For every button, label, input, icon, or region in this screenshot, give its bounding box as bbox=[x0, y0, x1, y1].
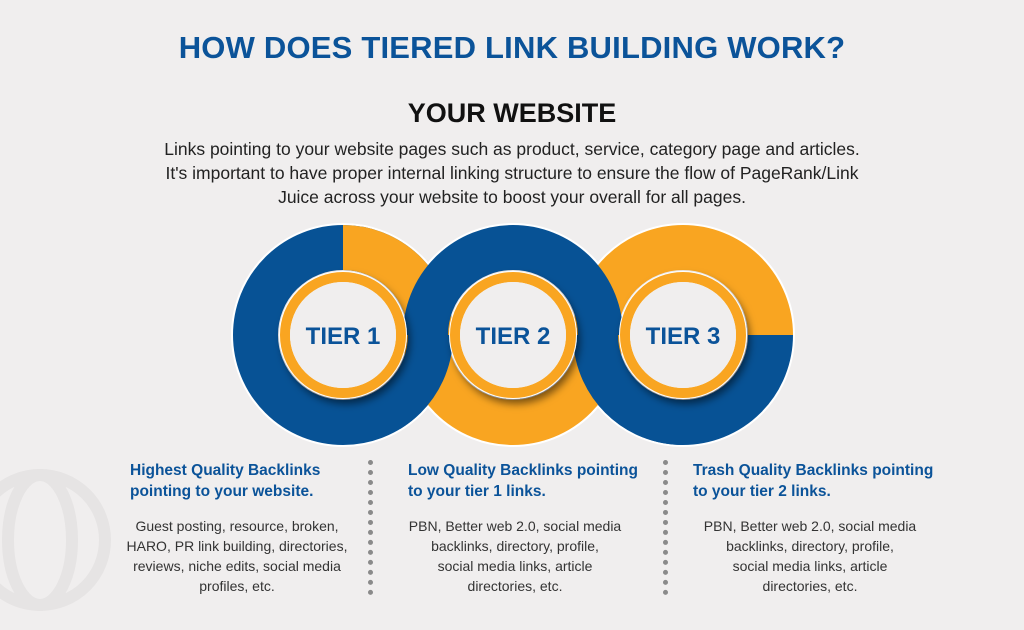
heading: tier 1: pointing to your website. bbox=[130, 483, 313, 500]
panel: tier 3 description bbox=[693, 462, 933, 594]
title: HOW DOES TIERED LINK BUILDING WORK? bbox=[179, 30, 845, 65]
heading: tier 1 bbox=[130, 462, 320, 500]
heading: tier 3: to your tier 2 links. bbox=[693, 483, 831, 500]
tier 3 badge: TIER 3 bbox=[646, 323, 720, 350]
text: tier 2 examples: backlinks, directory, profile, bbox=[431, 538, 599, 554]
heading: tier 2: Low Quality Backlinks pointing bbox=[408, 462, 638, 479]
heading: tier 2 bbox=[408, 462, 638, 500]
text: tier 3 examples: directories, etc. bbox=[763, 578, 857, 594]
ring 2 bbox=[426, 248, 600, 422]
text: tier 2 examples: PBN, Better web 2.0, social media bbox=[409, 518, 621, 534]
heading: tier 3 bbox=[693, 462, 933, 500]
text: tier 1 examples: reviews, niche edits, social media bbox=[133, 558, 341, 574]
tier 3 badge bbox=[619, 271, 747, 399]
heading: tier 2: to your tier 1 links. bbox=[408, 483, 546, 500]
text: tier 2 examples: social media links, article bbox=[438, 558, 592, 574]
text: tier 3 examples: social media links, article bbox=[733, 558, 887, 574]
text: tier 3 examples: PBN, Better web 2.0, social media bbox=[704, 518, 916, 534]
tier 2 badge bbox=[449, 271, 577, 399]
heading: tier 1: Highest Quality Backlinks bbox=[130, 462, 320, 479]
chart: interlocking tier rings bbox=[231, 223, 795, 447]
text: tier 2 examples bbox=[409, 518, 622, 594]
divider bbox=[368, 460, 373, 595]
background globe decoration bbox=[0, 469, 111, 611]
panel: tier 2 description bbox=[408, 462, 638, 594]
text: tier 3 examples bbox=[704, 518, 916, 594]
text block: website description: It's important to have proper internal linking structure to ensure the flow of PageRank/Link bbox=[165, 163, 859, 183]
tier 1 badge bbox=[279, 271, 407, 399]
text: tier 3 examples: backlinks, directory, profile, bbox=[726, 538, 894, 554]
text block: website description: Links pointing to your website pages such as product, service, category page and articles. bbox=[164, 139, 860, 159]
ring 1 bbox=[256, 248, 430, 422]
text: tier 1 examples: profiles, etc. bbox=[199, 578, 275, 594]
heading: tier 3: Trash Quality Backlinks pointing bbox=[693, 462, 933, 479]
text: tier 1 examples: Guest posting, resource, broken, bbox=[135, 518, 339, 534]
heading: your website: YOUR WEBSITE bbox=[408, 98, 616, 128]
text block: website description: Juice across your website to boost your overall for all pages. bbox=[278, 187, 746, 207]
tier 2 badge: TIER 2 bbox=[476, 323, 550, 350]
panel: tier 1 description bbox=[126, 462, 347, 594]
divider bbox=[663, 460, 668, 595]
text block: website description bbox=[164, 139, 860, 207]
text: tier 1 examples: HARO, PR link building, directories, bbox=[126, 538, 347, 554]
ring 3 bbox=[596, 248, 770, 422]
text: tier 1 examples bbox=[126, 518, 347, 594]
tier 1 badge: TIER 1 bbox=[306, 323, 380, 350]
text: tier 2 examples: directories, etc. bbox=[468, 578, 562, 594]
